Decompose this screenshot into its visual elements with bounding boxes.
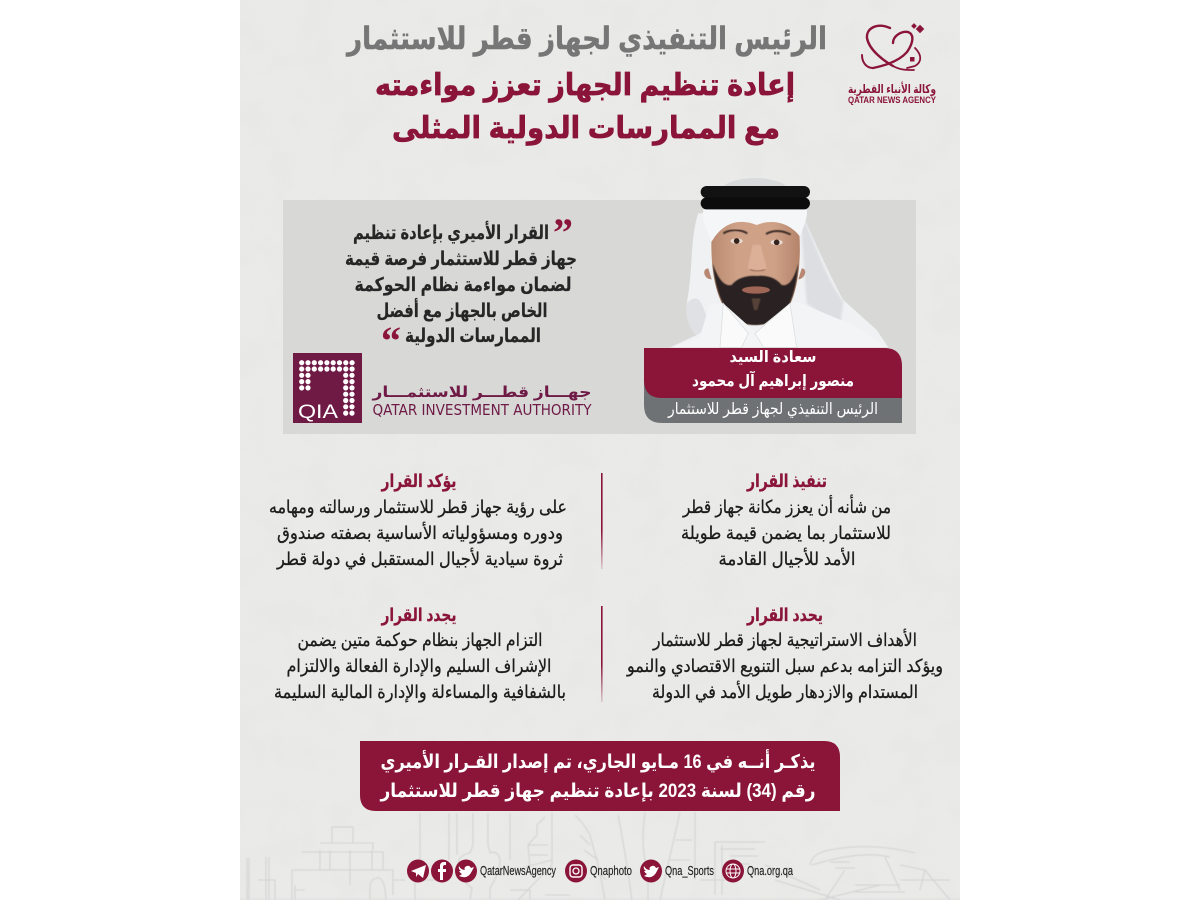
quote text xyxy=(345,210,577,363)
QIA logo xyxy=(293,353,592,423)
icon: facebook xyxy=(431,860,453,882)
body: ويؤكد التزامه بدعم سبل التنويع الاقتصادي والنمو xyxy=(626,656,943,677)
heading: تنفيذ القرار xyxy=(746,471,827,492)
block: defines goals xyxy=(626,605,943,703)
quote line 5: الممارسات الدولية xyxy=(405,326,541,347)
handle: QatarNewsAgency: QatarNewsAgency xyxy=(480,864,557,878)
handle: Qnaphoto: Qnaphoto xyxy=(590,864,632,878)
callout line 1: يذكـر أنــه في 16 مـايو الجاري، تم إصدار القـرار الأميري xyxy=(380,749,816,774)
maroon name block xyxy=(644,348,902,398)
body: الأهداف الاستراتيجية لجهاز قطر للاستثمار xyxy=(652,629,917,651)
block: implementation xyxy=(681,471,891,569)
body: للاستثمار بما يضمن قيمة طويلة xyxy=(681,523,891,544)
social footer xyxy=(407,860,793,882)
QIA Arabic name: جهـــاز قطـــر للاستثمـــار xyxy=(371,384,592,401)
icon: telegram xyxy=(407,860,429,882)
person name: منصور إبراهيم آل محمود xyxy=(692,370,854,390)
callout: decree note xyxy=(360,741,840,811)
heading: يحدد القرار xyxy=(746,605,823,626)
body xyxy=(626,629,943,703)
callout line 2: رقم (34) لسنة 2023 بإعادة تنظيم جهاز قطر للاستثمار xyxy=(380,781,816,802)
body xyxy=(274,630,566,703)
block: renews commitment xyxy=(274,605,566,703)
opening quote mark: ” xyxy=(553,210,573,255)
quote line 4: الخاص بالجهاز مع أفضل xyxy=(376,298,548,322)
handle: Qna_Sports: Qna_Sports xyxy=(665,864,714,878)
icon: globe xyxy=(722,860,744,882)
body: ثروة سيادية لأجيال المستقبل في دولة قطر xyxy=(276,548,563,570)
closing quote mark: “ xyxy=(381,318,401,363)
body xyxy=(681,494,891,569)
title line 3: مع الممارسات الدولية المثلى xyxy=(392,112,780,146)
grey title strip xyxy=(644,375,902,423)
honorific: سعادة السيد xyxy=(730,349,816,366)
quote line 2: جهاز قطر للاستثمار فرصة قيمة xyxy=(345,249,577,270)
heading: يجدد القرار xyxy=(381,605,456,626)
body: ودوره ومسؤولياته الأساسية بصفته صندوق xyxy=(277,522,563,544)
QIA English name: QATAR INVESTMENT AUTHORITY xyxy=(372,401,592,419)
title line 2: إعادة تنظيم الجهاز تعزز مواءمته xyxy=(375,69,795,103)
quote line 3: لضمان مواءمة نظام الحوكمة xyxy=(354,275,572,296)
skyline illustration xyxy=(240,812,960,900)
block: confirms xyxy=(269,471,567,570)
person role: الرئيس التنفيذي لجهاز قطر للاستثمار xyxy=(667,401,878,419)
body: التزام الجهاز بنظام حوكمة متين يضمن xyxy=(298,630,542,651)
panel: quote band xyxy=(283,200,916,434)
icon: QIA square xyxy=(293,353,362,423)
handle: website: Qna.org.qa xyxy=(747,864,793,878)
column dividers xyxy=(601,473,603,702)
body: الأمد للأجيال القادمة xyxy=(718,548,856,569)
body: الإشراف السليم والإدارة الفعالة والالتزام xyxy=(286,656,552,677)
title line 1: الرئيس التنفيذي لجهاز قطر للاستثمار xyxy=(345,21,827,57)
name plate xyxy=(644,348,902,423)
portrait xyxy=(670,178,888,347)
QNA logo xyxy=(848,23,936,105)
body xyxy=(269,497,567,570)
heading: يؤكد القرار xyxy=(381,471,456,492)
body: المستدام والازدهار طويل الأمد في الدولة xyxy=(652,681,918,703)
body: بالشفافية والمساءلة والإدارة المالية السليمة xyxy=(274,682,566,703)
icon: twitter xyxy=(455,860,477,882)
quote line 1: القرار الأميري بإعادة تنظيم xyxy=(353,221,549,245)
icon: instagram xyxy=(565,860,587,882)
icon: QIA square: QIA xyxy=(298,402,338,423)
QNA English name: QATAR NEWS AGENCY xyxy=(848,95,936,105)
icon: QNA emblem xyxy=(862,23,924,70)
title xyxy=(345,21,827,146)
QNA Arabic name: وكالة الأنباء القطرية xyxy=(848,81,936,97)
icon: twitter sports xyxy=(640,860,662,882)
body: على رؤية جهاز قطر للاستثمار ورسالته ومهامه xyxy=(269,497,567,518)
body: من شأنه أن يعزز مكانة جهاز قطر xyxy=(682,494,891,518)
background paper panel xyxy=(240,0,960,900)
